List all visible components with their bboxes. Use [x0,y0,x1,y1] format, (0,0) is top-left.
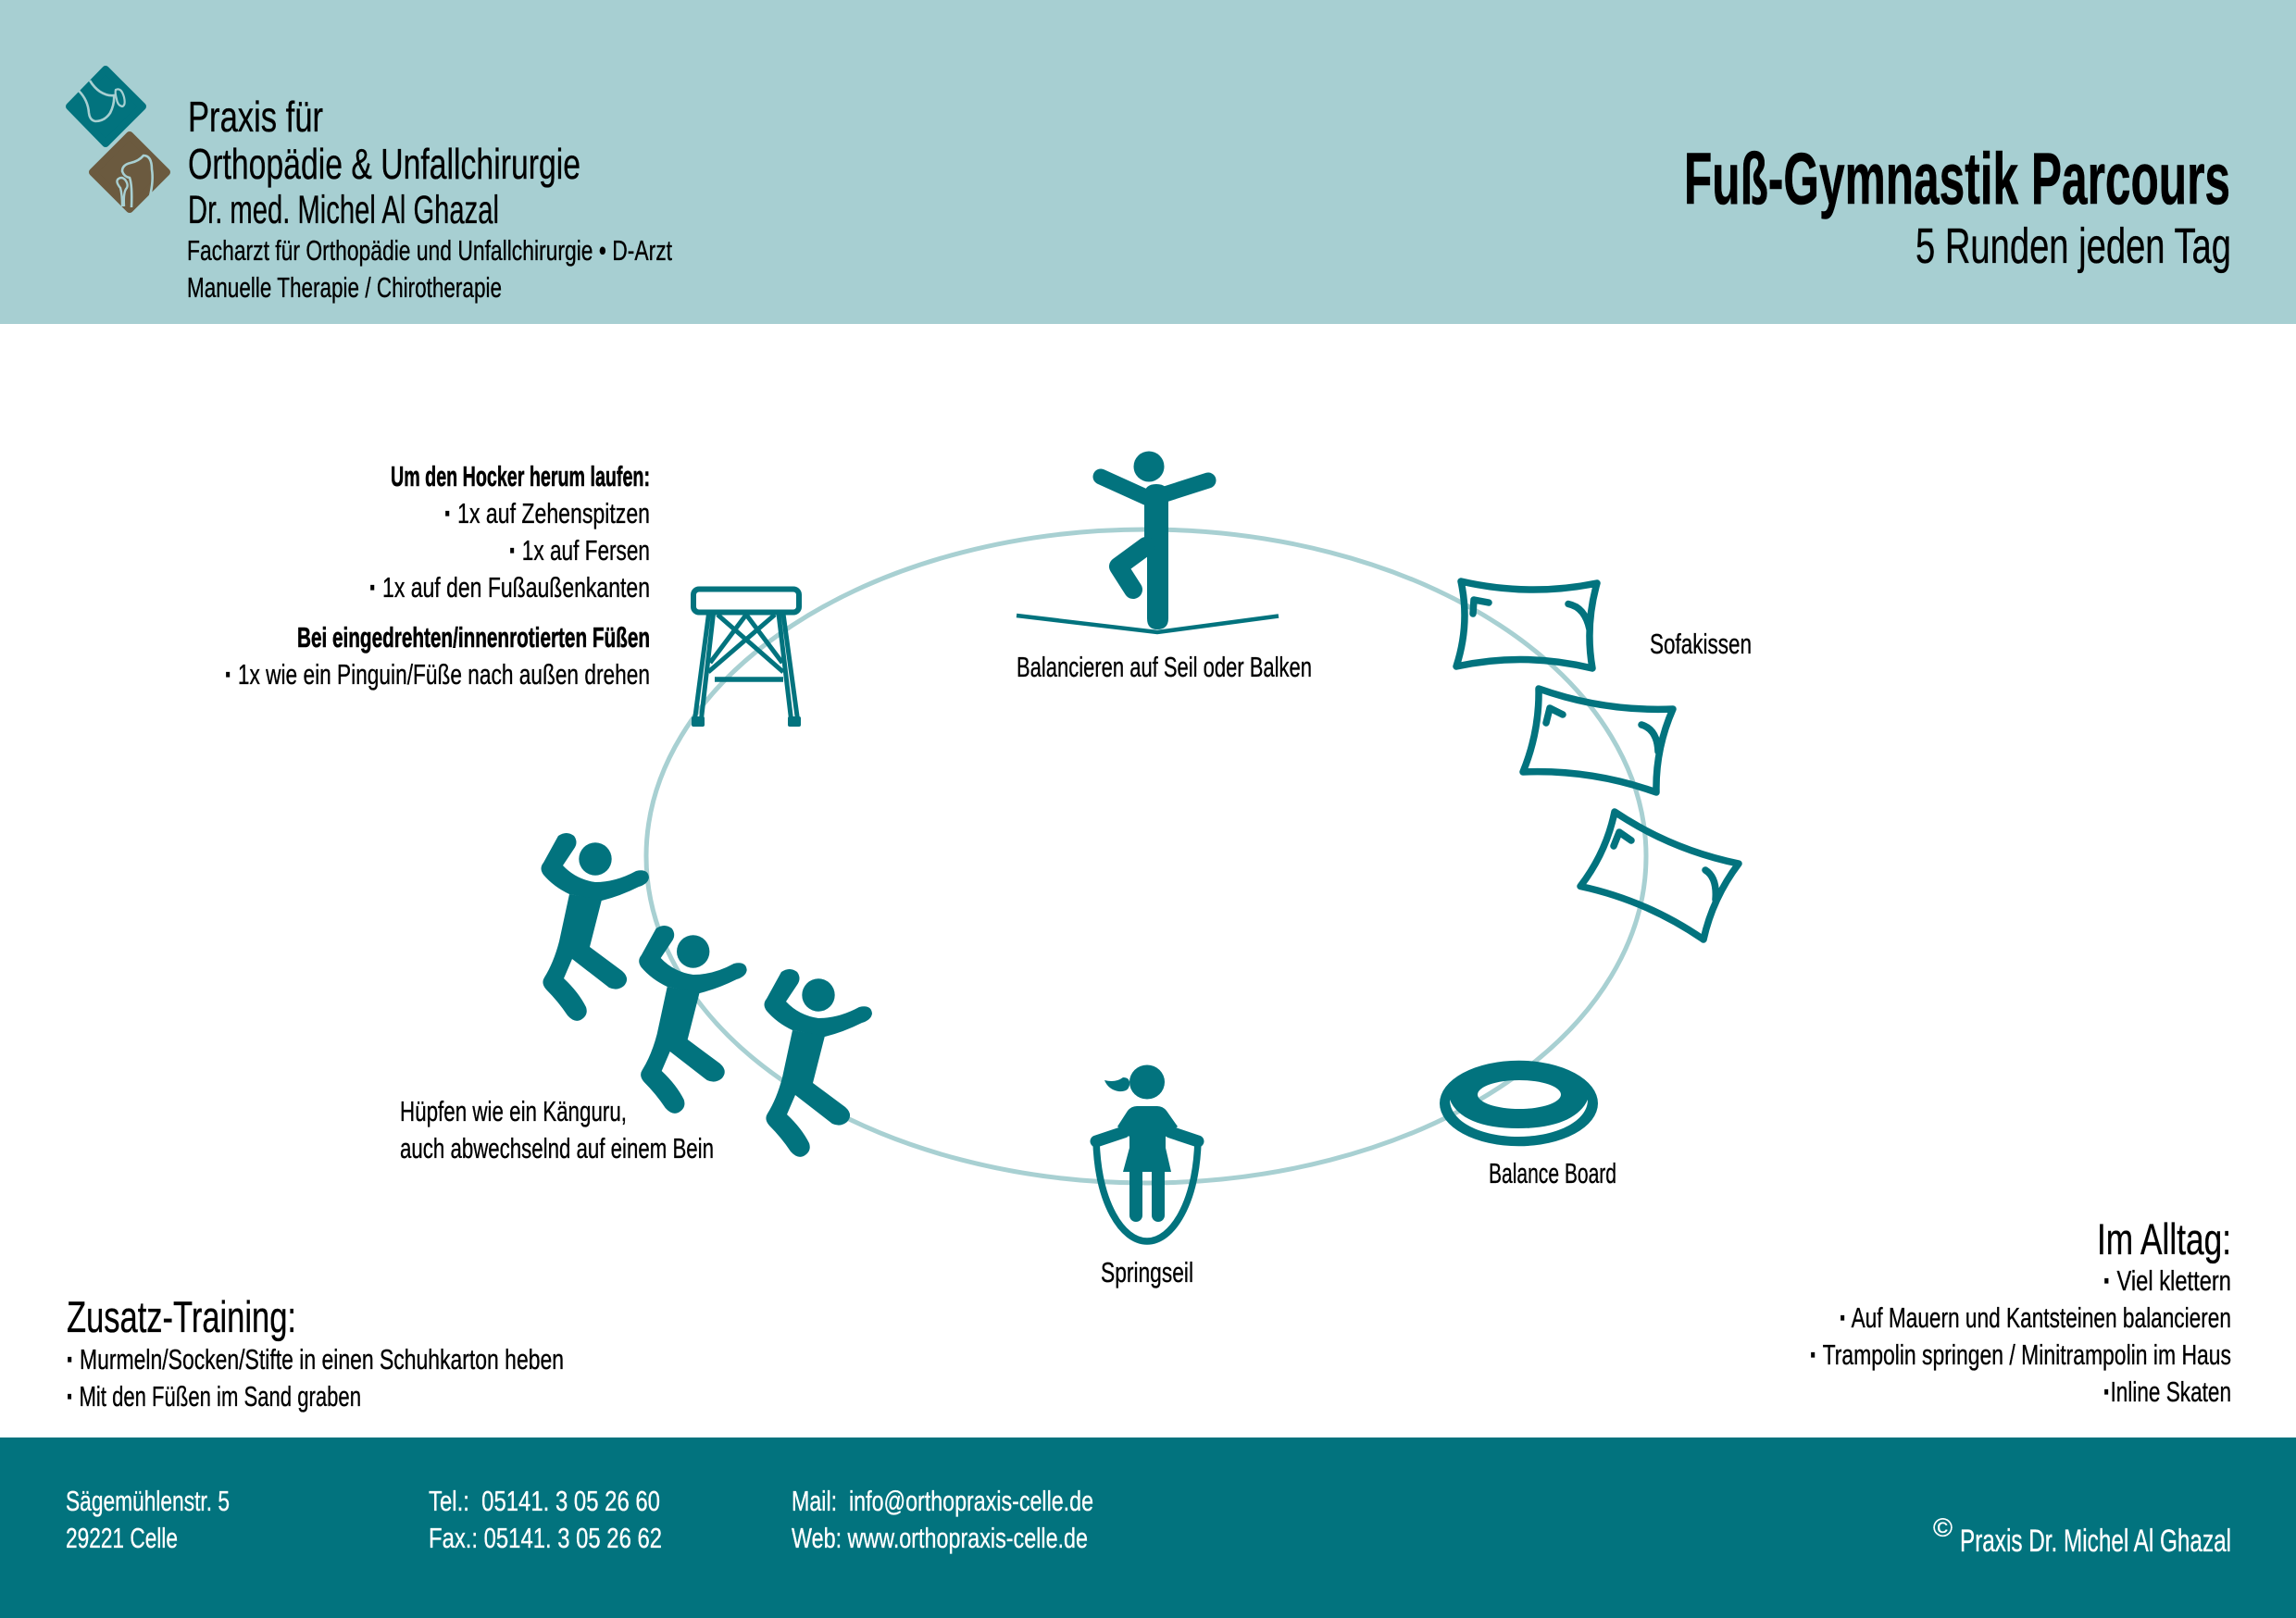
label: kangaroo hops: auch abwechselnd auf einem Bein [400,1132,714,1164]
icon: stool [693,589,799,725]
icon: jumper 2 [639,926,747,1114]
header band [0,0,2296,324]
logo diamond: teal foot [69,69,143,143]
practice name block [187,93,672,304]
figure [1101,452,1208,629]
practice name block: Manuelle Therapie / Chirotherapie [187,271,502,304]
text block: everyday life: · Viel klettern [2103,1264,2231,1297]
icon: jumper 3 [765,969,872,1157]
text block: additional training: · Mit den Füßen im Sand graben [67,1380,361,1413]
label: balance board: Balance Board [1489,1157,1616,1189]
footer: phone and fax [429,1485,662,1554]
practice name block: Orthopädie & Unfallchirurgie [188,140,580,188]
text block: everyday life [1810,1214,2231,1408]
text block: everyday life: Im Alltag: [2097,1214,2231,1263]
footer: phone and fax: Tel.: 05141. 3 05 26 60 [429,1485,660,1517]
footer: mail and web: Web: www.orthopraxis-celle.de [792,1522,1088,1554]
practice name block: Dr. med. Michel Al Ghazal [188,188,499,232]
footer: address: 29221 Celle [66,1522,178,1554]
footer: mail and web [792,1485,1093,1554]
footer: address: Sägemühlenstr. 5 [66,1485,230,1517]
cushion 2 [1523,689,1673,792]
logo diamond: brown tooth joint [93,135,167,209]
text block: additional training: Zusatz-Training: [67,1292,296,1341]
stool instructions: · 1x auf Fersen [509,534,650,566]
label: kangaroo hops [400,1095,714,1164]
label: kangaroo hops: Hüpfen wie ein Känguru, [400,1095,627,1127]
icon: girl with skipping rope [1096,1064,1198,1241]
text block: everyday life: ·Inline Skaten [2103,1375,2231,1408]
stool instructions: Bei eingedrehten/innenrotierten Füßen [297,621,650,653]
rope [1017,616,1279,632]
exercise loop ellipse [646,529,1646,1183]
practice name block: Facharzt für Orthopädie und Unfallchirurgie • D-Arzt [187,234,672,267]
logo [69,69,167,209]
footer: phone and fax: Fax.: 05141. 3 05 26 62 [429,1522,662,1554]
icon: tightrope walker [1017,452,1279,632]
icon: jumper 1 [541,833,649,1021]
icon: sofa cushions [1456,581,1739,940]
footer: copyright [1933,1513,2231,1559]
practice name block: Praxis für [188,93,323,141]
text block: additional training [67,1292,564,1413]
label: cushions: Sofakissen [1650,628,1752,660]
footer: address [66,1485,230,1554]
stool instructions [225,460,650,691]
cushion 3 [1580,812,1739,940]
footer: mail and web: Mail: info@orthopraxis-celle.de [792,1485,1093,1517]
cushion 1 [1456,581,1597,668]
stool instructions: · 1x auf Zehenspitzen [444,497,650,529]
footer band [0,1438,2296,1618]
text block: additional training: · Murmeln/Socken/Stifte in einen Schuhkarton heben [67,1343,564,1375]
stool instructions: · 1x auf den Fußaußenkanten [369,571,650,604]
label: skipping rope: Springseil [1101,1256,1193,1288]
footer: copyright: © [1933,1513,1953,1542]
stool instructions: Um den Hocker herum laufen: [391,460,650,492]
label: balancing: Balancieren auf Seil oder Balken [1017,651,1312,683]
icon: balance board [1440,1061,1598,1146]
stool instructions: · 1x wie ein Pinguin/Füße nach außen drehen [225,658,650,691]
